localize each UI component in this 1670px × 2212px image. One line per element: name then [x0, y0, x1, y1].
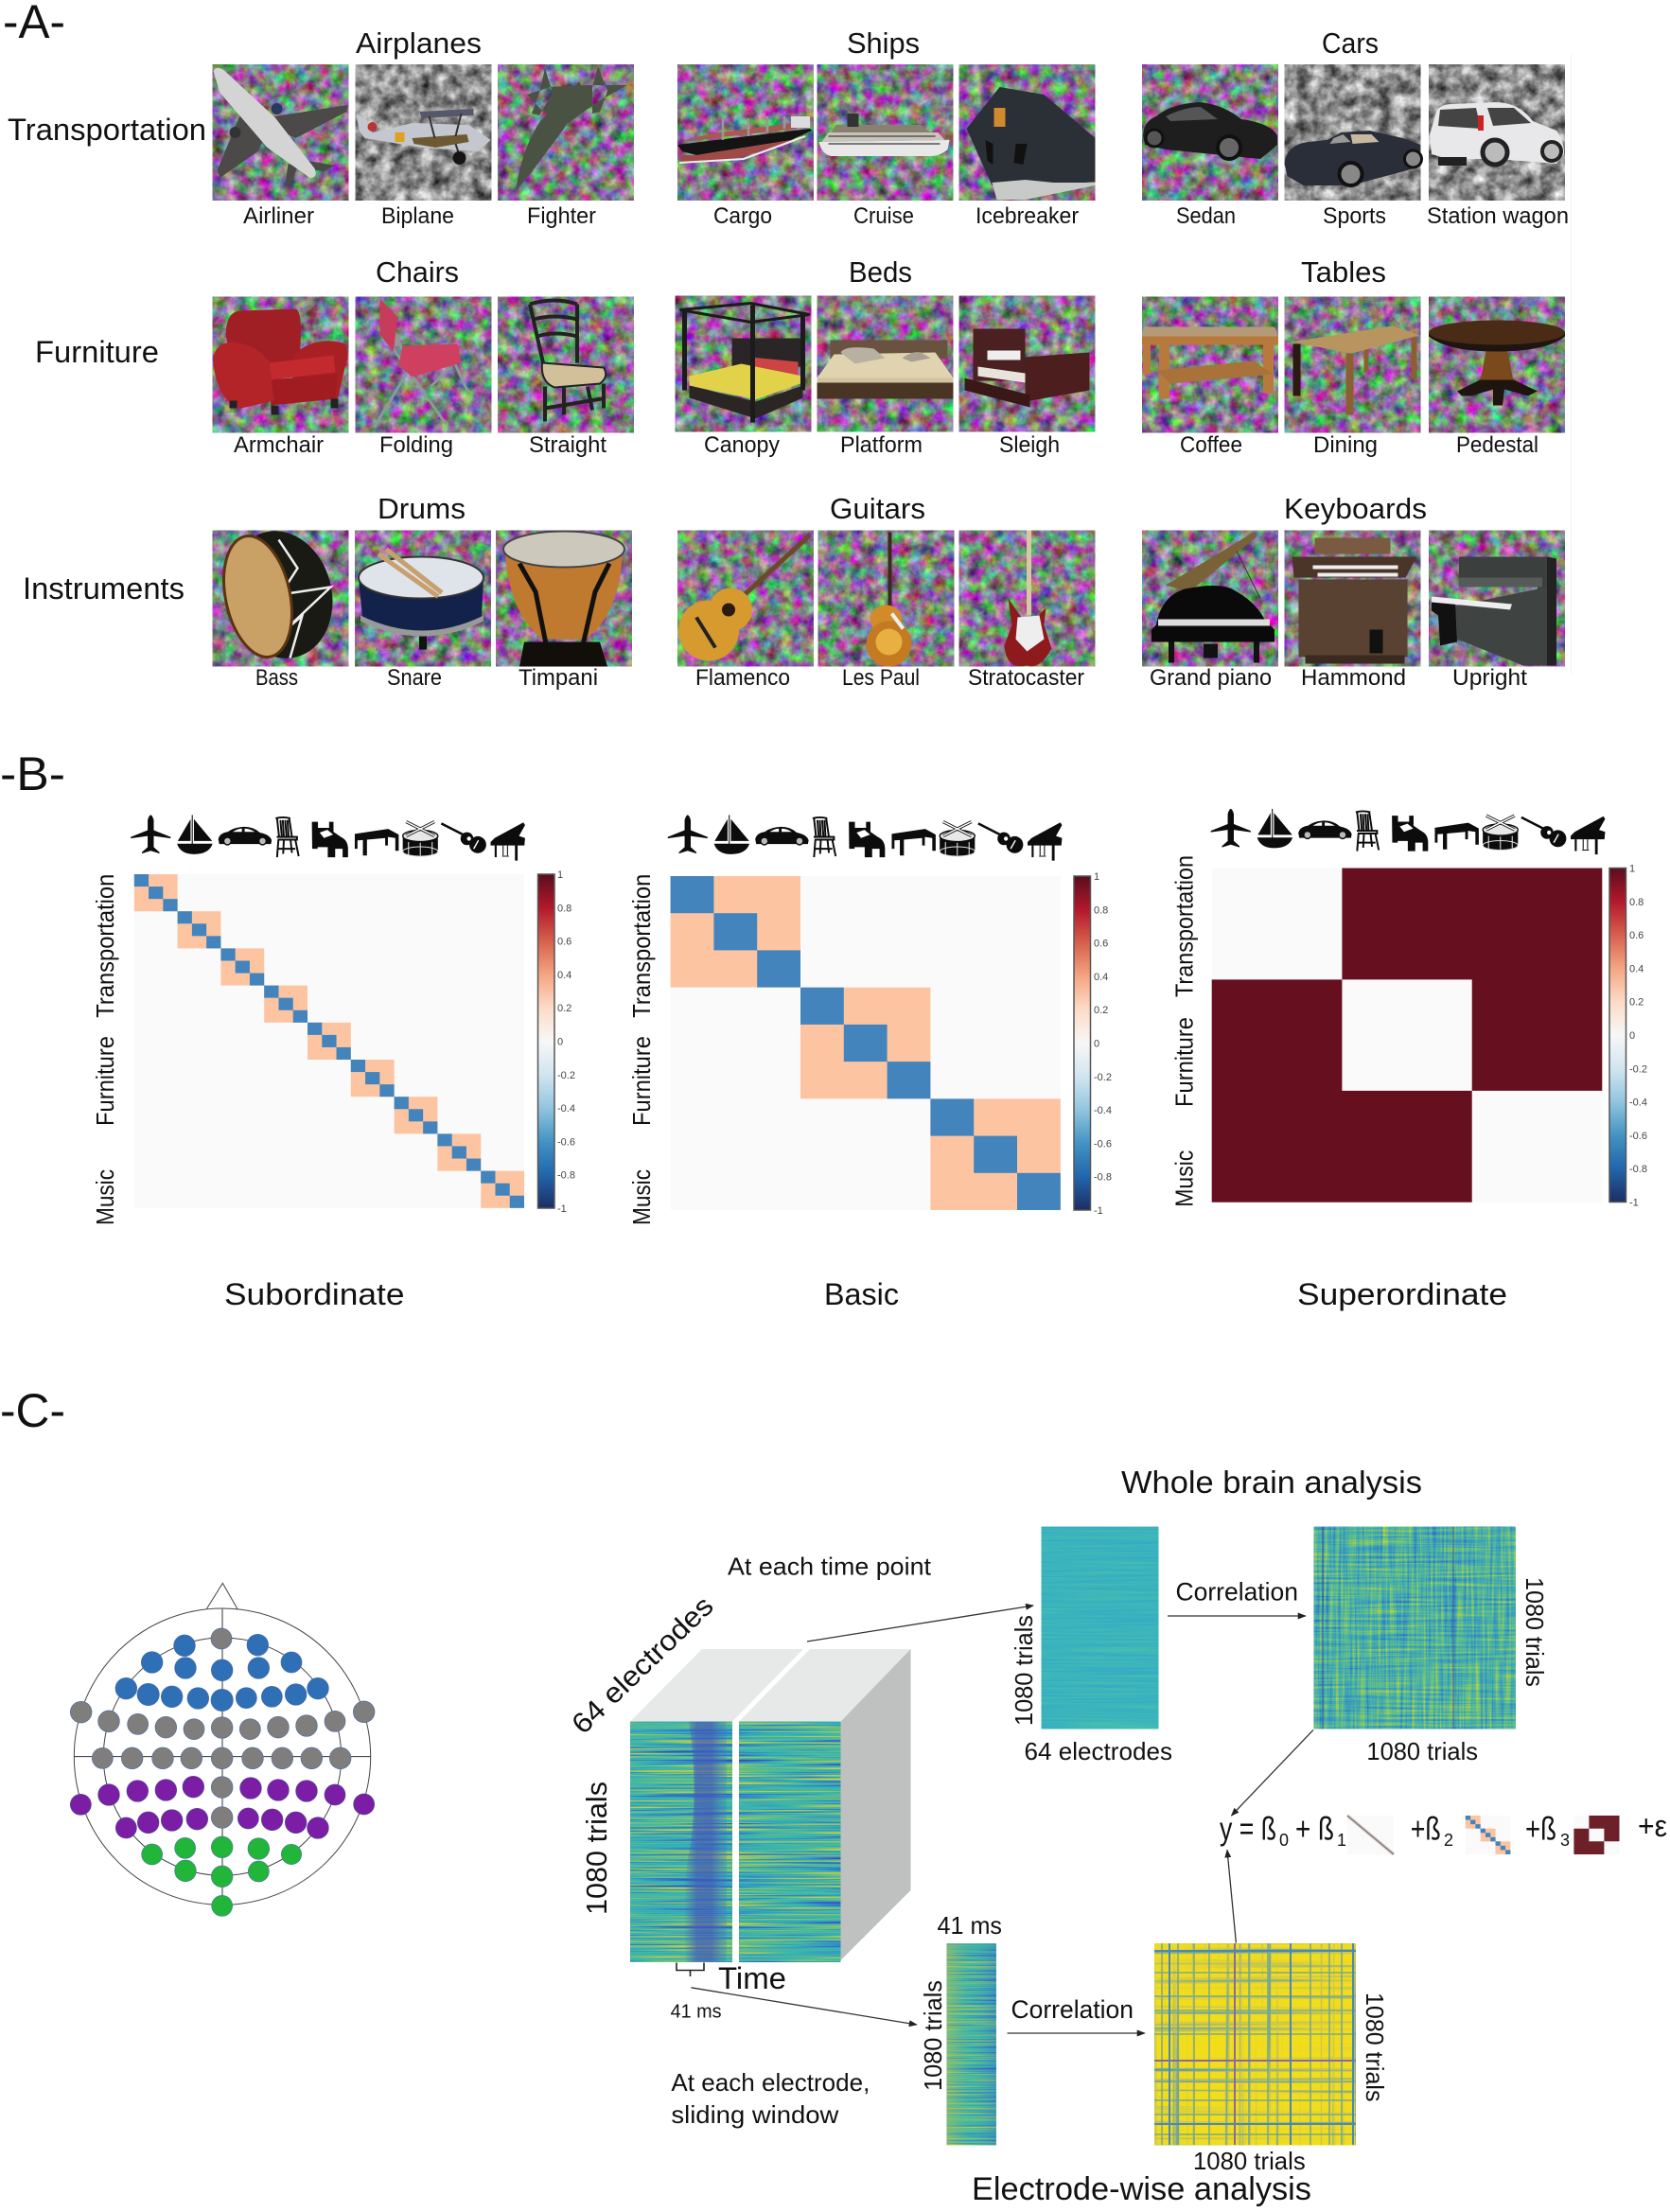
image: pedestal table	[1429, 297, 1565, 433]
caption: At each electrode, sliding window: sliding window	[671, 2100, 839, 2129]
category titles: Cars	[1322, 26, 1379, 60]
image: airliner	[212, 64, 348, 201]
regression equation: +ß	[1525, 1812, 1556, 1848]
electrode head map	[70, 1583, 375, 1916]
equation icon: superordinate	[1573, 1816, 1620, 1854]
colour bar: -1	[1629, 1198, 1639, 1209]
arrow: correlation	[1007, 2032, 1145, 2034]
row label: Instruments: Instruments	[23, 571, 185, 606]
caption: At each electrode, sliding window	[671, 2068, 870, 2129]
heading: Electrode-wise analysis: Electrode-wise analysis	[972, 2171, 1311, 2207]
object labels: Canopy	[704, 432, 780, 458]
colour bar: 0.8	[1629, 897, 1644, 908]
regression equation: +ß	[1411, 1812, 1441, 1848]
data cube	[630, 1649, 910, 1962]
heading: Whole brain analysis: Whole brain analysis	[1121, 1465, 1422, 1500]
colour bar: 0.6	[1629, 930, 1644, 941]
colour bar: -0.8	[1094, 1172, 1112, 1184]
colour bar	[1609, 863, 1647, 1209]
category icons	[668, 815, 1062, 861]
colour bar: 0.8	[1094, 904, 1108, 916]
colour bar: 0.4	[1094, 972, 1108, 983]
axis labels: Transportation	[91, 874, 119, 1018]
colour bar: -0.2	[557, 1070, 575, 1081]
colour bar: 0	[557, 1037, 563, 1048]
category titles: Beds	[849, 255, 912, 289]
image: dining table	[1285, 297, 1421, 433]
image: sports car	[1285, 64, 1421, 201]
matrix: whole brain RDM	[1314, 1527, 1516, 1729]
image: canopy bed	[676, 295, 812, 431]
arrow: correlation	[1168, 1615, 1306, 1617]
image: Hammond organ	[1285, 530, 1421, 666]
object labels	[234, 203, 1569, 691]
object labels: Platform	[840, 432, 923, 458]
subordinate matrix	[134, 874, 524, 1208]
panel: C analysis pipeline	[0, 1384, 1667, 2207]
colour bar: -0.4	[557, 1103, 575, 1115]
cube front slice 1	[630, 1722, 732, 1962]
colour bar: -0.6	[1094, 1138, 1112, 1150]
label: 1080 trials right: 1080 trials	[1521, 1577, 1549, 1687]
regression equation: 1	[1337, 1831, 1346, 1850]
cube side face	[840, 1649, 910, 1960]
label: 1080 trials below: 1080 trials	[1193, 2147, 1306, 2175]
image: Les Paul guitar	[817, 530, 954, 666]
label: 1080 trials: 1080 trials	[919, 1980, 947, 2091]
colour bar: -1	[557, 1203, 567, 1215]
category titles: Ships	[847, 26, 920, 60]
colour bar: -0.6	[557, 1136, 575, 1148]
colour bar: 0.6	[557, 937, 571, 948]
object labels: Cargo	[713, 203, 772, 229]
object labels: Fighter	[527, 203, 596, 229]
colour bar: -1	[1094, 1205, 1103, 1217]
basic matrix	[671, 876, 1061, 1210]
axis labels: Furniture	[91, 1036, 119, 1126]
colour bar: 0.8	[557, 903, 571, 914]
image: folding chair	[356, 297, 492, 433]
superordinate matrix	[1212, 869, 1602, 1203]
cube top face	[630, 1649, 910, 1722]
colour bar: 0.2	[1629, 997, 1644, 1009]
panel: A stimuli	[3, 0, 1571, 691]
image: sleigh bed	[959, 295, 1096, 431]
axis labels: Music	[1169, 1150, 1198, 1207]
image: upright piano	[1429, 530, 1565, 666]
colour bar: 0	[1094, 1039, 1099, 1050]
object labels: Pedestal	[1456, 432, 1538, 458]
heading: -B-: -B-	[0, 747, 65, 800]
object labels: Station wagon	[1427, 203, 1569, 229]
regression equation: 2	[1444, 1831, 1453, 1850]
arrow: electrode RDM to equation	[1227, 1850, 1236, 1943]
category icons	[1211, 809, 1605, 854]
axis labels: Music	[91, 1169, 119, 1225]
label: 1080 trials right: 1080 trials	[1361, 1993, 1389, 2102]
object labels: Airliner	[243, 203, 314, 229]
cube front slice 2	[739, 1722, 840, 1962]
axis labels: Furniture	[1169, 1017, 1198, 1107]
colour bar: 0.4	[557, 970, 571, 981]
colour bar	[1074, 871, 1112, 1217]
category titles: Guitars	[830, 492, 925, 525]
object labels: Dining	[1313, 432, 1378, 458]
arrow: window to electrode slice	[691, 1988, 917, 2025]
caption: Subordinate: Subordinate	[224, 1277, 405, 1311]
label: Correlation: Correlation	[1011, 1995, 1134, 2024]
image: fighter	[498, 64, 634, 201]
regression equation	[1220, 1809, 1667, 1854]
regression equation: 3	[1560, 1831, 1570, 1850]
arrow: RDM to equation	[1232, 1729, 1313, 1816]
matrix group: Subordinate	[91, 815, 575, 1311]
colour bar: 1	[1094, 871, 1099, 883]
label: 1080 trials below: 1080 trials	[1366, 1737, 1478, 1765]
label: 41 ms: 41 ms	[937, 1911, 1002, 1940]
object labels: Bass	[255, 665, 298, 691]
caption: At each time point: At each time point	[728, 1552, 932, 1580]
image: flamenco guitar	[677, 530, 814, 666]
panel: B model matrices	[0, 747, 1647, 1311]
object labels: Les Paul	[842, 665, 920, 691]
axis labels	[1169, 855, 1198, 1207]
colour bar: 0.2	[557, 1003, 571, 1014]
colour bar: -0.8	[1629, 1164, 1647, 1175]
image: snare drum	[355, 530, 491, 666]
axis label: 64 electrodes: 64 electrodes	[566, 1590, 720, 1740]
matrix: electrode sliding window	[947, 1943, 996, 2145]
caption: At each electrode, sliding window: At each electrode,	[671, 2068, 870, 2097]
colour bar: 0.4	[1629, 963, 1644, 974]
image: Stratocaster guitar	[959, 530, 1096, 666]
image: timpani	[496, 530, 632, 666]
image: grand piano	[1142, 530, 1278, 666]
image: platform bed	[817, 295, 954, 431]
image: armchair	[212, 297, 348, 433]
regression equation: +ε	[1638, 1809, 1667, 1843]
equation icon: basic	[1466, 1816, 1510, 1854]
axis labels: Transportation	[627, 874, 656, 1018]
object labels: Sedan	[1176, 203, 1236, 229]
caption: Superordinate: Superordinate	[1297, 1277, 1507, 1311]
colour bar: -0.8	[557, 1170, 575, 1182]
object labels: Grand piano	[1150, 665, 1272, 691]
object labels: Sports	[1323, 203, 1386, 229]
regression equation: y = ß	[1220, 1812, 1276, 1848]
colour bar: 1	[1629, 863, 1635, 874]
caption: Basic: Basic	[824, 1277, 899, 1311]
colour bar: 1	[557, 869, 563, 881]
image: coffee table	[1142, 297, 1278, 433]
matrix group: Basic	[627, 815, 1112, 1311]
image: icebreaker	[959, 64, 1096, 201]
heading: -C-: -C-	[0, 1384, 65, 1437]
category titles: Keyboards	[1284, 492, 1427, 525]
regression equation: + ß	[1295, 1812, 1334, 1848]
object labels: Stratocaster	[968, 665, 1084, 691]
object labels: Biplane	[381, 203, 454, 229]
image: cargo ship	[677, 64, 814, 201]
colour bar	[537, 869, 575, 1215]
arrow: cube to whole brain slice	[807, 1606, 1033, 1641]
category titles: Tables	[1301, 255, 1386, 289]
axis label: 1080 trials: 1080 trials	[580, 1782, 613, 1915]
colour bar: 0	[1629, 1030, 1635, 1042]
label: 41 ms window: 41 ms	[671, 2002, 722, 2023]
category titles: Drums	[378, 492, 466, 525]
axis labels: Transportation	[1169, 855, 1198, 997]
colour bar: -0.4	[1094, 1105, 1112, 1116]
axis labels	[627, 874, 656, 1225]
label: 64 electrodes: 64 electrodes	[1024, 1737, 1172, 1765]
axis labels	[91, 874, 119, 1225]
row label: Furniture: Furniture	[35, 335, 159, 369]
colour bar: -0.2	[1629, 1063, 1647, 1075]
object labels: Sleigh	[999, 432, 1060, 458]
object labels: Timpani	[519, 665, 598, 691]
category titles: Airplanes	[356, 26, 482, 60]
object labels: Cruise	[853, 203, 914, 229]
row label: Transportation: Transportation	[8, 113, 206, 147]
object labels: Armchair	[234, 432, 324, 458]
category icons	[131, 815, 525, 861]
regression equation: 0	[1279, 1831, 1289, 1850]
object labels: Coffee	[1180, 432, 1242, 458]
colour bar: -0.2	[1094, 1072, 1112, 1083]
colour bar: -0.6	[1629, 1131, 1647, 1142]
colour bar: -0.4	[1629, 1097, 1647, 1109]
object labels: Straight	[529, 432, 606, 458]
label: 1080 trials: 1080 trials	[1010, 1615, 1038, 1726]
object labels: Flamenco	[695, 665, 790, 691]
matrix: electrode-wise RDM	[1154, 1943, 1356, 2145]
image: straight chair	[498, 297, 634, 433]
image: biplane	[356, 64, 492, 201]
category titles: Chairs	[376, 255, 459, 289]
object labels: Folding	[379, 432, 453, 458]
colour bar: 0.2	[1094, 1005, 1108, 1016]
image: sedan	[1142, 64, 1278, 201]
image: cruise ship	[817, 64, 954, 201]
axis labels: Furniture	[627, 1036, 656, 1126]
window bracket	[677, 1962, 704, 1976]
axis labels: Music	[627, 1169, 656, 1225]
object labels: Icebreaker	[976, 203, 1079, 229]
object labels: Snare	[387, 665, 442, 691]
axis label: Time: Time	[718, 1961, 786, 1995]
category titles	[356, 26, 1427, 525]
label: Correlation: Correlation	[1175, 1578, 1298, 1606]
matrix: whole brain electrodes by trials	[1041, 1527, 1158, 1729]
image: station wagon	[1429, 64, 1565, 201]
object labels: Upright	[1452, 665, 1527, 691]
object labels: Hammond	[1301, 665, 1406, 691]
equation icon: subordinate	[1347, 1816, 1394, 1854]
image: bass drum	[212, 519, 348, 670]
matrix group: Superordinate	[1169, 809, 1647, 1311]
colour bar: 0.6	[1094, 939, 1108, 950]
